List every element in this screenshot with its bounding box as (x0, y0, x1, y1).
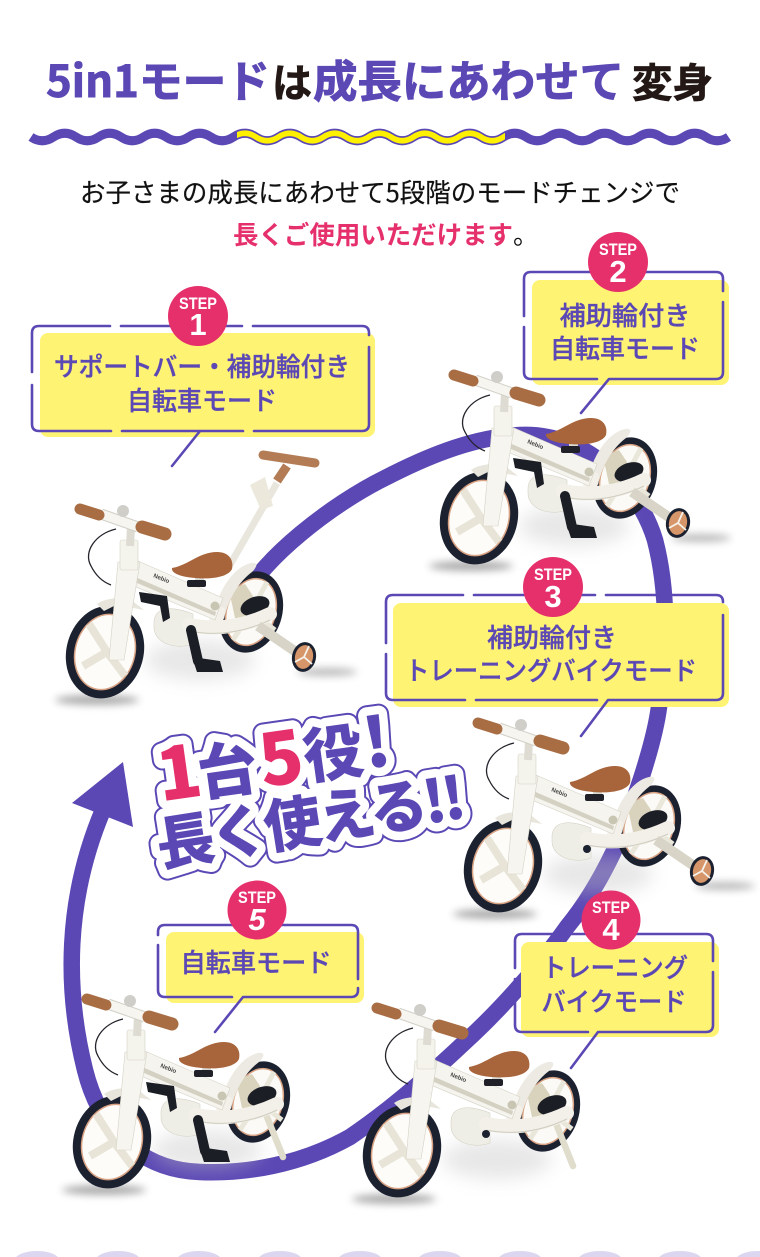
catchphrase badge: 長く使える!! (150, 751, 471, 883)
catchphrase badge: 5 (251, 698, 309, 808)
callout: step 1: 自転車モード (127, 381, 277, 418)
wavy divider (31, 133, 728, 141)
title: は (272, 51, 312, 109)
callout: step 2 (524, 232, 729, 413)
callout: step 4: 4 (602, 912, 620, 947)
catchphrase badge: 5 (251, 698, 309, 808)
callout: step 3: 3 (544, 579, 562, 614)
catchphrase badge: 1 (149, 712, 207, 822)
callout: step 5 (158, 880, 364, 1032)
catchphrase badge: 役 (297, 702, 368, 797)
bike: step 4: Nebio (449, 1072, 467, 1084)
catchphrase badge: 5 (251, 698, 309, 808)
catchphrase badge: 1 (149, 712, 207, 822)
catchphrase badge (149, 686, 471, 883)
callout: step 4 (515, 890, 719, 1068)
bike: step 1 with support bar: Nebio (152, 573, 170, 585)
catchphrase badge: 台 (191, 719, 263, 814)
callout: step 2: 2 (609, 254, 627, 289)
intro text: お子さまの成長にあわせて5段階のモードチェンジで (80, 173, 680, 210)
bike: step 3 (453, 719, 755, 922)
callout: step 1: 1 (189, 307, 207, 342)
callout: step 5: STEP (238, 888, 276, 907)
catchphrase badge: 台 (191, 719, 263, 814)
callout: step 4: トレーニング (542, 948, 688, 985)
catchphrase badge: 役 (297, 702, 368, 797)
callout: step 3: トレーニングバイクモード (405, 651, 697, 688)
callout: step 3 (386, 557, 729, 736)
catchphrase badge: 台 (191, 719, 263, 814)
catchphrase badge: ! (355, 687, 396, 788)
bike: step 1 with support bar (55, 455, 357, 708)
catchphrase badge: 1 (149, 712, 207, 822)
title (46, 46, 713, 110)
callout: step 3: STEP (534, 565, 572, 584)
callout: step 2: 自転車モード (550, 329, 700, 366)
bike: step 4 (352, 1004, 590, 1207)
intro text: 。 (513, 215, 539, 252)
bike: step 2: Nebio (526, 439, 544, 451)
title: 変身 (632, 51, 713, 109)
callout: step 3: 補助輪付き (487, 618, 617, 655)
bike: step 2 (429, 371, 731, 574)
callout: step 4: バイクモード (542, 982, 686, 1019)
bike: step 5 (62, 995, 300, 1198)
callout: step 1 (32, 286, 375, 466)
catchphrase badge: 長く使える!! (150, 751, 471, 883)
bike: step 5: Nebio (159, 1063, 177, 1075)
catchphrase badge: 役 (297, 702, 368, 797)
bike: step 3: Nebio (550, 787, 568, 799)
callout: step 4: STEP (592, 898, 630, 917)
callout: step 1: サポートバー・補助輪付き (54, 347, 350, 384)
callout: step 1: STEP (179, 294, 217, 313)
intro text (80, 173, 680, 252)
title: 成長にあわせて (313, 46, 624, 110)
catchphrase badge: ! (355, 687, 396, 788)
catchphrase badge: ! (355, 687, 396, 788)
scalloped footer edge (15, 1251, 760, 1257)
callout: step 2: STEP (599, 240, 637, 259)
callout: step 5: 5 (248, 902, 266, 937)
callout: step 5: 自転車モード (180, 943, 332, 980)
growth arrow (72, 435, 665, 1172)
title: 5in1モード (46, 46, 270, 110)
catchphrase badge: 長く使える!! (150, 751, 471, 883)
intro text: 長くご使用いただけます (233, 215, 513, 252)
callout: step 2: 補助輪付き (560, 296, 690, 333)
